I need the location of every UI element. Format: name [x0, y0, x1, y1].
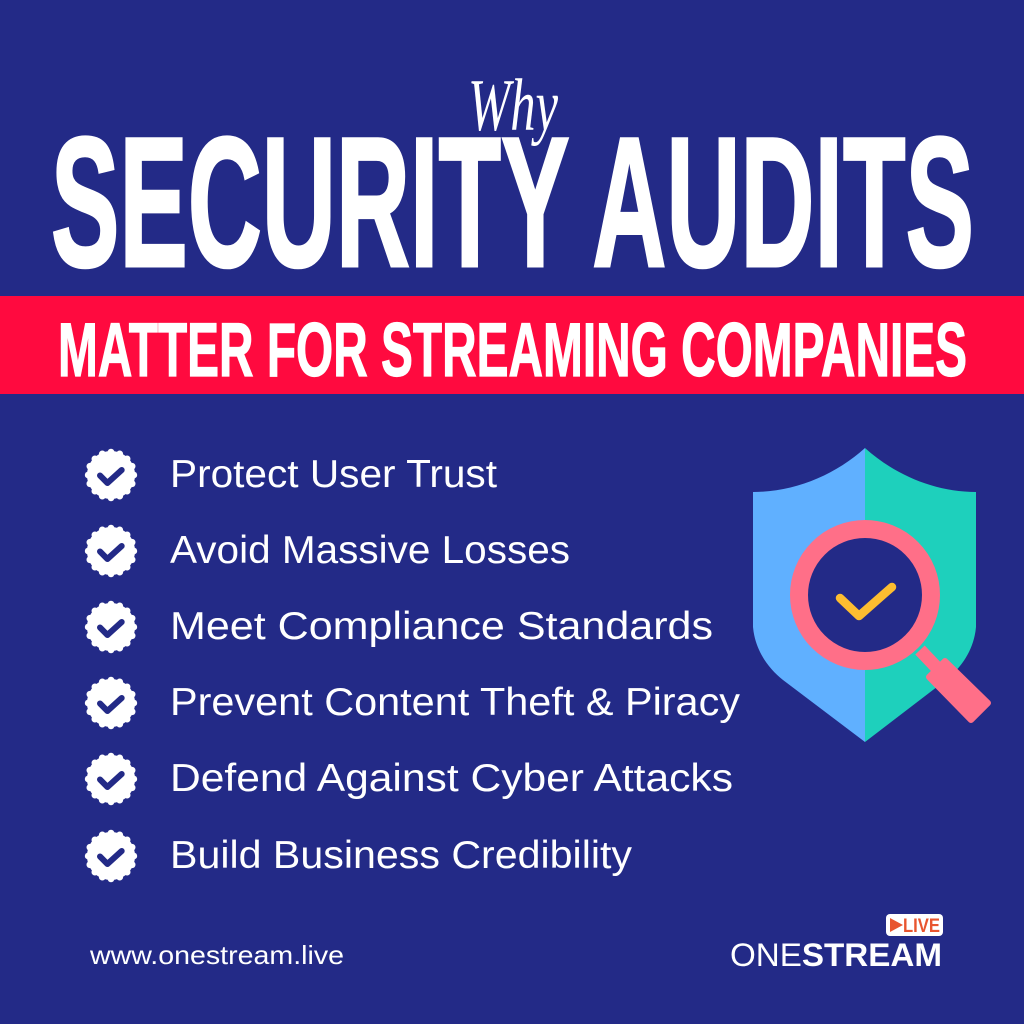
- live badge: LIVE: [903, 916, 940, 937]
- shield left half: [753, 448, 865, 742]
- item: build business credibility: Build Business Credibility: [170, 834, 633, 877]
- item: avoid massive losses: [85, 525, 570, 577]
- magnifier lens: [799, 529, 931, 661]
- item: meet compliance standards: [85, 601, 713, 653]
- item: defend against cyber attacks: [85, 753, 733, 805]
- red banner: [0, 296, 1024, 394]
- magnifier handle: [920, 650, 988, 720]
- title accent: why: Why: [468, 65, 558, 147]
- icon: shield with magnifying glass: [753, 448, 988, 742]
- item: build business credibility: [85, 830, 633, 882]
- check mark: [840, 587, 892, 616]
- shield right half: [865, 448, 976, 742]
- item: prevent content theft and piracy: Prevent Content Theft & Piracy: [170, 681, 741, 724]
- item: protect user trust: Protect User Trust: [170, 453, 497, 496]
- website url: www.onestream.live: [89, 940, 344, 970]
- item: prevent content theft and piracy: [85, 677, 741, 729]
- item: defend against cyber attacks: Defend Against Cyber Attacks: [170, 757, 733, 800]
- live badge: [886, 914, 943, 937]
- logo: onestream live: [730, 914, 943, 973]
- checklist: [85, 449, 741, 882]
- item: meet compliance standards: Meet Compliance Standards: [170, 605, 713, 648]
- item: protect user trust: [85, 449, 497, 501]
- wordmark: ONESTREAM: [730, 937, 942, 973]
- item: avoid massive losses: Avoid Massive Losses: [170, 529, 570, 572]
